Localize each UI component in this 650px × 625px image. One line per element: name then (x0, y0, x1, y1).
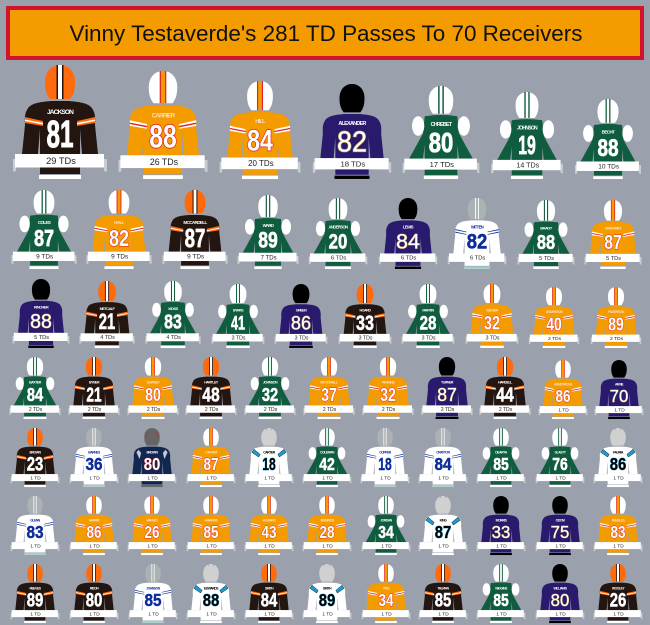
jersey: Wooley 26 (594, 564, 642, 623)
jersey: Hoard 33: HOARD (360, 308, 371, 312)
jersey: Arvie 70: ARVIE (615, 382, 624, 386)
jersey: Howard 43: 1 TD (264, 543, 275, 549)
jersey: Crayton 84: CRAYTON (436, 450, 451, 454)
jersey: Baxter 84: BAXTER (29, 381, 42, 385)
jersey: Talman 85 (419, 564, 467, 623)
row 3 jerseys (13, 279, 641, 348)
jersey: Odom 75 (536, 496, 584, 555)
jersey: Paderson 89: PADERSON (608, 310, 625, 314)
jersey: Howard 43: HOWARD (263, 518, 276, 522)
jersey: Armstrong 86: ARMSTRONG (554, 382, 573, 386)
jersey: Baxter 84: 84 (27, 384, 44, 405)
jersey: Hartley 48: 48 (202, 384, 220, 407)
jersey: Jackson 81 (13, 65, 107, 179)
jersey: Rison 80: 80 (86, 589, 102, 611)
jersey: Ward 89: 89 (258, 228, 278, 253)
jersey: Hall 82: 82 (109, 225, 129, 251)
jersey: Kincher 88: 88 (30, 310, 52, 333)
jersey: Edwards 88: 1 TD (206, 611, 217, 617)
jersey: Anderson 40 (529, 287, 579, 348)
jersey: Carrier 88: 26 TDs (150, 157, 179, 167)
jersey: Brown 23: 1 TD (30, 475, 41, 481)
jersey: Hartley 48 (185, 357, 237, 419)
jersey: McDowell 37: MCDOWELL (320, 381, 339, 385)
jersey: Brown 23: 23 (27, 453, 43, 475)
jersey: Chrebet 80: CHREBET (431, 122, 453, 128)
jersey: Byner 21: 21 (86, 384, 102, 407)
jersey: Alexander 82: 18 TDs (340, 159, 365, 168)
jersey: Jennings 28: 1 TD (322, 543, 333, 549)
jersey: Hill 84 (220, 81, 300, 179)
jersey: Wiggins 85: WIGGINS (495, 586, 508, 590)
jersey: Carter 18: CARTER (263, 450, 276, 454)
jersey: Becht 88 (575, 99, 641, 179)
jersey: Moss 83: MOSS (168, 306, 179, 311)
jersey: Wooley 26: 26 (610, 589, 626, 611)
jersey: Reeves 89: 89 (27, 589, 43, 611)
jersey: Tate 34: 1 TD (381, 611, 392, 617)
jersey: Johnson 19: 14 TDs (516, 162, 540, 170)
jersey: Hoard 33 (339, 284, 391, 348)
jersey: Glasty 76: GLASTY (554, 450, 567, 454)
jersey: Johnson 32 (244, 357, 296, 419)
jersey: King 87: 1 TD (438, 543, 449, 549)
jersey: Harvey 26: 1 TD (147, 543, 158, 549)
jersey: Hoard 33: 3 TDs (359, 336, 373, 342)
jersey: Dawsey 80: DAWSEY (147, 381, 160, 385)
jersey: Byner 21: BYNER (89, 381, 100, 385)
jersey: Hawkins 85: 1 TD (206, 543, 217, 549)
jersey: Harris 86: 86 (86, 522, 102, 542)
jersey: Harvey 26 (128, 496, 176, 555)
jersey: Chrebet 80: 17 TDs (430, 160, 454, 169)
title banner: Vinny Testaverde's 281 TD Passes To 70 Receivers (70, 21, 582, 46)
jersey: Glasty 76 (536, 428, 584, 487)
jersey: Peebles 83: 1 TD (613, 543, 624, 549)
jersey: Armstrong 86: 86 (555, 386, 571, 406)
jersey: Perkins 32: PERKINS (382, 381, 395, 385)
jersey: Dearth 85: 85 (493, 454, 509, 474)
jersey: Drewrey 87 (585, 200, 641, 269)
jersey: Brady 88: 88 (537, 231, 555, 254)
jersey: Williams 80: WILLIAMS (553, 586, 568, 590)
jersey: Byner 21: 2 TDs (88, 407, 102, 413)
jersey: Rison 80: RISON (90, 586, 99, 590)
jersey: Copper 18 (361, 428, 409, 487)
jersey: Ward 89 (237, 195, 299, 269)
jersey: Harris 86 (70, 496, 118, 555)
jersey: Tate 34: TATE (383, 586, 390, 590)
jersey: Carrier 88: 88 (149, 119, 177, 155)
jersey: Jennings 28 (303, 496, 351, 555)
jersey: Arvie 70: 1 TD (614, 407, 625, 413)
jersey: Morris 33 (477, 496, 525, 555)
jersey: Alexander 82: 82 (337, 126, 367, 158)
jersey: Williams 80: 1 TD (555, 611, 566, 617)
jersey: Turner 87 (421, 357, 473, 419)
jersey: Byars 41 (212, 284, 264, 348)
jersey: Johnson 85: 85 (144, 590, 162, 610)
jersey: Smith 89 (303, 564, 351, 623)
jersey: Crayton 84: 84 (434, 454, 452, 474)
jersey: Hawkins 85: 85 (203, 522, 219, 542)
jersey: Coleman 42: 1 TD (322, 475, 333, 481)
jersey: Green 86 (275, 284, 327, 348)
jersey: Witten 82: 6 TDs (470, 256, 485, 262)
row 2 jerseys (11, 190, 641, 269)
jersey: Byars 41: 3 TDs (232, 336, 246, 342)
jersey: Hartley 48: 2 TDs (205, 407, 219, 413)
jersey: Brown 80 (128, 428, 176, 487)
jersey: Martin 28: 3 TDs (422, 336, 436, 342)
jersey: Baxter 84: 2 TDs (29, 407, 43, 413)
jersey: Carrier 88 (118, 71, 208, 179)
jersey: Johnson 85 (129, 564, 177, 623)
jersey: Talman 85: 85 (435, 589, 451, 611)
jersey: Fauria 86: FAURIA (613, 450, 624, 454)
jersey: Hardell 44: 2 TDs (499, 407, 513, 413)
jersey: Talman 85: TALMAN (437, 586, 450, 590)
jersey: Anderson 40: 40 (546, 314, 562, 334)
jersey: Crayton 84: 1 TD (438, 475, 449, 481)
row 6 jerseys (11, 496, 642, 555)
jersey: Harris 86: HARRIS (89, 518, 100, 522)
jersey: Carter 87: 1 TD (206, 475, 217, 481)
jersey: Williams 80 (536, 564, 584, 623)
jersey: Hall 82: 9 TDs (111, 254, 128, 261)
jersey: Green 86: 86 (291, 313, 311, 334)
jersey: Drewrey 87: DREWREY (605, 226, 622, 231)
jersey: McCardell 87: 9 TDs (187, 254, 204, 261)
jersey: Jackson 81: JACKSON (47, 109, 74, 116)
jersey: Glenn 83: 1 TD (30, 543, 41, 549)
jersey: Johnson 32: JOHNSON (263, 381, 278, 385)
jersey: Wilder 32: 32 (484, 313, 500, 334)
jersey: Rison 80 (70, 564, 118, 623)
jersey: Chrebet 80: 80 (429, 127, 453, 158)
jersey: Copper 18: 18 (378, 454, 392, 474)
jersey: Dearth 85 (477, 428, 525, 487)
jersey: Brown 80: BROWN (147, 450, 158, 454)
jersey: Peebles 83: PEEBLES (612, 518, 626, 522)
jersey: Armstrong 86 (539, 360, 587, 419)
jersey: Byner 21 (68, 357, 120, 419)
jersey: Johnson 85: 1 TD (148, 611, 159, 617)
jersey: Kincher 88 (13, 279, 69, 348)
jersey: Metcalf 21: METCALF (100, 306, 116, 311)
jersey: Odom 75: 75 (551, 522, 570, 542)
jersey: Arvie 70 (595, 360, 643, 419)
jersey: Williams 80: 80 (551, 590, 570, 610)
jersey: Carter 18 (245, 428, 293, 487)
jersey: Wilder 32 (466, 284, 518, 348)
jersey: Dawsey 80: 2 TDs (147, 407, 161, 413)
jersey: Witten 82: WITTEN (471, 225, 484, 230)
jersey: Jordan 34: 1 TD (381, 543, 392, 549)
jersey: Turner 87: 2 TDs (441, 407, 455, 413)
jersey: Barnes 36: 36 (85, 454, 103, 474)
jersey: Jordan 34: 34 (378, 522, 394, 542)
jersey: Copper 18: 1 TD (380, 475, 391, 481)
jersey: Carter 18: 1 TD (264, 475, 275, 481)
jersey: Harris 86: 1 TD (89, 543, 100, 549)
jersey: Ward 89: 7 TDs (261, 255, 277, 261)
jersey: Witten 82: 82 (467, 230, 487, 253)
jersey: Glenn 83: 83 (26, 522, 44, 542)
jersey: Coleman 42 (303, 428, 351, 487)
jersey: Hill 84: 84 (247, 126, 273, 158)
jersey: Morris 33: MORRIS (496, 518, 508, 522)
jersey: Wilder 32: 3 TDs (486, 336, 500, 342)
jersey: Jackson 81: 29 TDs (46, 156, 76, 166)
jersey: Lewis 84 (379, 198, 437, 269)
jersey: Johnson 19: 19 (518, 132, 536, 160)
jersey: Jennings 28: JENNINGS (320, 518, 335, 522)
jersey: Hawkins 85: HAWKINS (205, 518, 219, 522)
jersey: Smith 84 (245, 564, 293, 623)
jersey: Hartley 48: HARTLEY (204, 381, 219, 385)
jersey: Metcalf 21: 21 (99, 309, 115, 334)
jersey: Reeves 89: 1 TD (30, 611, 41, 617)
jersey: McDowell 37: 2 TDs (323, 407, 337, 413)
jersey: Wilder 32: WILDER (486, 308, 499, 312)
jersey: Tate 34 (362, 564, 410, 623)
jersey: Johnson 85: JOHNSON (146, 586, 161, 590)
jersey: Hall 82 (86, 190, 152, 269)
jersey: McDowell 37 (303, 357, 355, 419)
jersey: Reeves 89: REEVES (29, 586, 42, 590)
jersey: Harvey 26: HARVEY (146, 518, 159, 522)
jersey: Smith 89: 89 (319, 590, 335, 610)
jersey: Arvie 70: 70 (610, 386, 629, 406)
jersey: Anderson 20: 20 (329, 230, 347, 253)
jersey: King 87: KING (440, 518, 447, 522)
jersey: Smith 84: SMITH (265, 586, 274, 590)
jersey: Perkins 32: 32 (380, 384, 396, 405)
jersey: Lewis 84: 6 TDs (401, 256, 416, 262)
jersey: Wooley 26: 1 TD (613, 611, 624, 617)
jersey: Tate 34: 34 (378, 590, 394, 610)
jersey: Edwards 88: 88 (203, 590, 219, 610)
jersey: McCardell 87: 87 (185, 223, 205, 253)
jersey: Dawsey 80 (127, 357, 179, 419)
jersey: Wiggins 85: 85 (493, 590, 509, 610)
row 4 jerseys (9, 357, 643, 419)
jersey: Carter 87: CARTER (205, 450, 218, 454)
jersey: McCardell 87: MCCARDELL (183, 220, 207, 225)
jersey: Drewrey 87: 87 (604, 231, 622, 254)
jersey: Paderson 89: 2 TDs (610, 336, 624, 342)
jersey: Johnson 19 (491, 92, 563, 179)
jersey: Anderson 20: 6 TDs (331, 256, 346, 262)
jersey: Anderson 20 (309, 198, 367, 269)
jersey: McDowell 37: 37 (321, 384, 337, 405)
jersey: Johnson 32: 32 (262, 384, 278, 405)
row 5 jerseys (11, 428, 642, 487)
title banner (8, 8, 642, 58)
jersey: Hawkins 85 (187, 496, 235, 555)
jersey: Brady 88: BRADY (540, 226, 553, 231)
jersey: Paderson 89 (591, 287, 641, 348)
jersey: Brady 88 (518, 200, 574, 269)
jersey: Barnes 36: BARNES (88, 450, 101, 454)
jersey: Metcalf 21 (79, 281, 135, 348)
jersey: Smith 84: 84 (261, 589, 277, 611)
jersey: Smith 89: 1 TD (322, 611, 333, 617)
jersey: Perkins 32: 2 TDs (382, 407, 396, 413)
jersey: Dearth 85: DEARTH (495, 450, 508, 454)
jersey: King 87 (419, 496, 467, 555)
jersey: Reeves 89 (11, 564, 59, 623)
jersey: Green 86: 3 TDs (295, 336, 309, 342)
jersey: Dearth 85: 1 TD (496, 475, 507, 481)
jersey: Becht 88: 88 (597, 135, 619, 162)
jersey: Lewis 84: 84 (396, 230, 420, 253)
jersey: Baxter 84 (9, 357, 61, 419)
jersey: Morris 33: 33 (492, 522, 511, 542)
jersey: Brown 23: BROWN (30, 450, 41, 454)
jersey: Johnson 32: 2 TDs (264, 407, 278, 413)
jersey: Glenn 83 (11, 496, 59, 555)
jersey: Howard 43 (245, 496, 293, 555)
jersey: Dawsey 80: 80 (145, 384, 161, 405)
jersey: Green 86: GREEN (296, 308, 307, 312)
jersey: Fauria 86: 1 TD (613, 475, 624, 481)
jersey: Byars 41: BYARS (233, 308, 244, 312)
jersey: Brown 80: 1 TD (147, 475, 158, 481)
jersey: Brady 88: 5 TDs (539, 256, 554, 262)
jersey: Morris 33: 1 TD (496, 543, 507, 549)
jersey: Carter 18: 18 (262, 454, 276, 474)
jersey: Johnson 19: JOHNSON (517, 125, 538, 131)
jersey: Becht 88: BECHT (602, 129, 615, 134)
jersey: Barnes 36 (70, 428, 118, 487)
jersey: Glasty 76: 76 (552, 454, 568, 474)
jersey: Paderson 89: 89 (608, 314, 624, 334)
jersey: Carter 87: 87 (203, 454, 219, 474)
jersey: Wiggins 85 (477, 564, 525, 623)
jersey: Drewrey 87: 5 TDs (606, 256, 621, 262)
jersey: Hall 82: HALL (114, 220, 125, 225)
jersey: Ward 89: WARD (263, 223, 274, 228)
jersey: Perkins 32 (362, 357, 414, 419)
jersey: Martin 28 (402, 284, 454, 348)
jersey: Chrebet 80 (403, 86, 479, 179)
jersey: Metcalf 21: 4 TDs (100, 335, 115, 341)
jersey: Byars 41: 41 (231, 313, 245, 334)
jersey: Howard 43: 43 (261, 522, 277, 542)
jersey: Hoard 33: 33 (356, 311, 374, 335)
jersey: Anderson 40: ANDERSON (546, 310, 563, 314)
jersey: Turner 87: TURNER (441, 381, 454, 385)
jersey: Glasty 76: 1 TD (555, 475, 566, 481)
jersey: Witten 82 (448, 198, 506, 269)
jersey: Brown 80: 80 (144, 454, 160, 474)
jersey: McCardell 87 (162, 190, 228, 269)
jersey: Coles 87: COLES (38, 220, 51, 225)
jersey: Fauria 86: 86 (610, 454, 626, 474)
jersey: Lewis 84: LEWIS (403, 225, 414, 230)
jersey: Hardell 44: HARDELL (498, 381, 513, 385)
jersey: Hardell 44: 44 (496, 384, 514, 407)
jersey: Coles 87: 87 (34, 225, 54, 251)
jersey: Turner 87: 87 (437, 384, 457, 405)
jersey: Wooley 26: WOOLEY (612, 586, 625, 590)
jersey: Coleman 42: 42 (319, 454, 335, 474)
jersey: Edwards 88 (187, 564, 235, 623)
jersey: Fauria 86 (594, 428, 642, 487)
jersey: Alexander 82 (313, 84, 391, 179)
jersey: Kincher 88: 5 TDs (34, 335, 49, 341)
jersey: Copper 18: COPPER (379, 450, 392, 454)
jersey: Carter 87 (187, 428, 235, 487)
jersey: Moss 83: 83 (164, 312, 182, 334)
jersey: Glenn 83: GLENN (30, 518, 41, 522)
jersey: Armstrong 86: 1 TD (558, 407, 569, 413)
jersey: Alexander 82: ALEXANDER (338, 121, 366, 127)
jersey: Moss 83 (145, 281, 201, 348)
jersey: Coleman 42: COLEMAN (320, 450, 335, 454)
jersey: Coles 87 (11, 190, 77, 269)
jersey: Barnes 36: 1 TD (89, 475, 100, 481)
jersey: Martin 28: 28 (420, 313, 437, 334)
jersey: Becht 88: 10 TDs (598, 163, 620, 170)
jersey: Kincher 88: KINCHER (34, 305, 49, 310)
jersey: Rison 80: 1 TD (89, 611, 100, 617)
jersey: Moss 83: 4 TDs (166, 335, 181, 341)
jersey: Anderson 20: ANDERSON (328, 225, 348, 230)
jersey: Jordan 34: JORDAN (380, 518, 393, 522)
row 7 jerseys (11, 564, 642, 623)
jersey: Anderson 40: 2 TDs (548, 336, 562, 342)
jersey: Martin 28: MARTIN (422, 308, 434, 312)
jersey: Smith 84: 1 TD (264, 611, 275, 617)
jersey: Peebles 83: 83 (610, 522, 626, 542)
jersey: Coles 87: 9 TDs (36, 254, 53, 261)
row 1 jerseys (13, 65, 641, 179)
jersey: Harvey 26: 26 (144, 522, 160, 542)
jersey: Jennings 28: 28 (319, 522, 335, 542)
jersey: Odom 75: ODOM (556, 518, 565, 522)
jersey: Peebles 83 (594, 496, 642, 555)
jersey: Odom 75: 1 TD (555, 543, 566, 549)
jersey: Hill 84: HILL (255, 119, 266, 125)
jersey: Edwards 88: EDWARDS (204, 586, 219, 590)
jersey: Crayton 84 (419, 428, 467, 487)
jersey: King 87: 87 (435, 522, 451, 542)
jersey: Jackson 81: 81 (46, 114, 74, 156)
jersey: Carrier 88: CARRIER (152, 112, 176, 119)
jersey: Hill 84: 20 TDs (248, 159, 274, 168)
jersey: Talman 85: 1 TD (438, 611, 449, 617)
jersey: Smith 89: SMITH (323, 586, 332, 590)
jersey: Wiggins 85: 1 TD (496, 611, 507, 617)
jersey: Hardell 44 (479, 357, 531, 419)
jersey: Brown 23 (11, 428, 59, 487)
jersey: Jordan 34 (362, 496, 410, 555)
